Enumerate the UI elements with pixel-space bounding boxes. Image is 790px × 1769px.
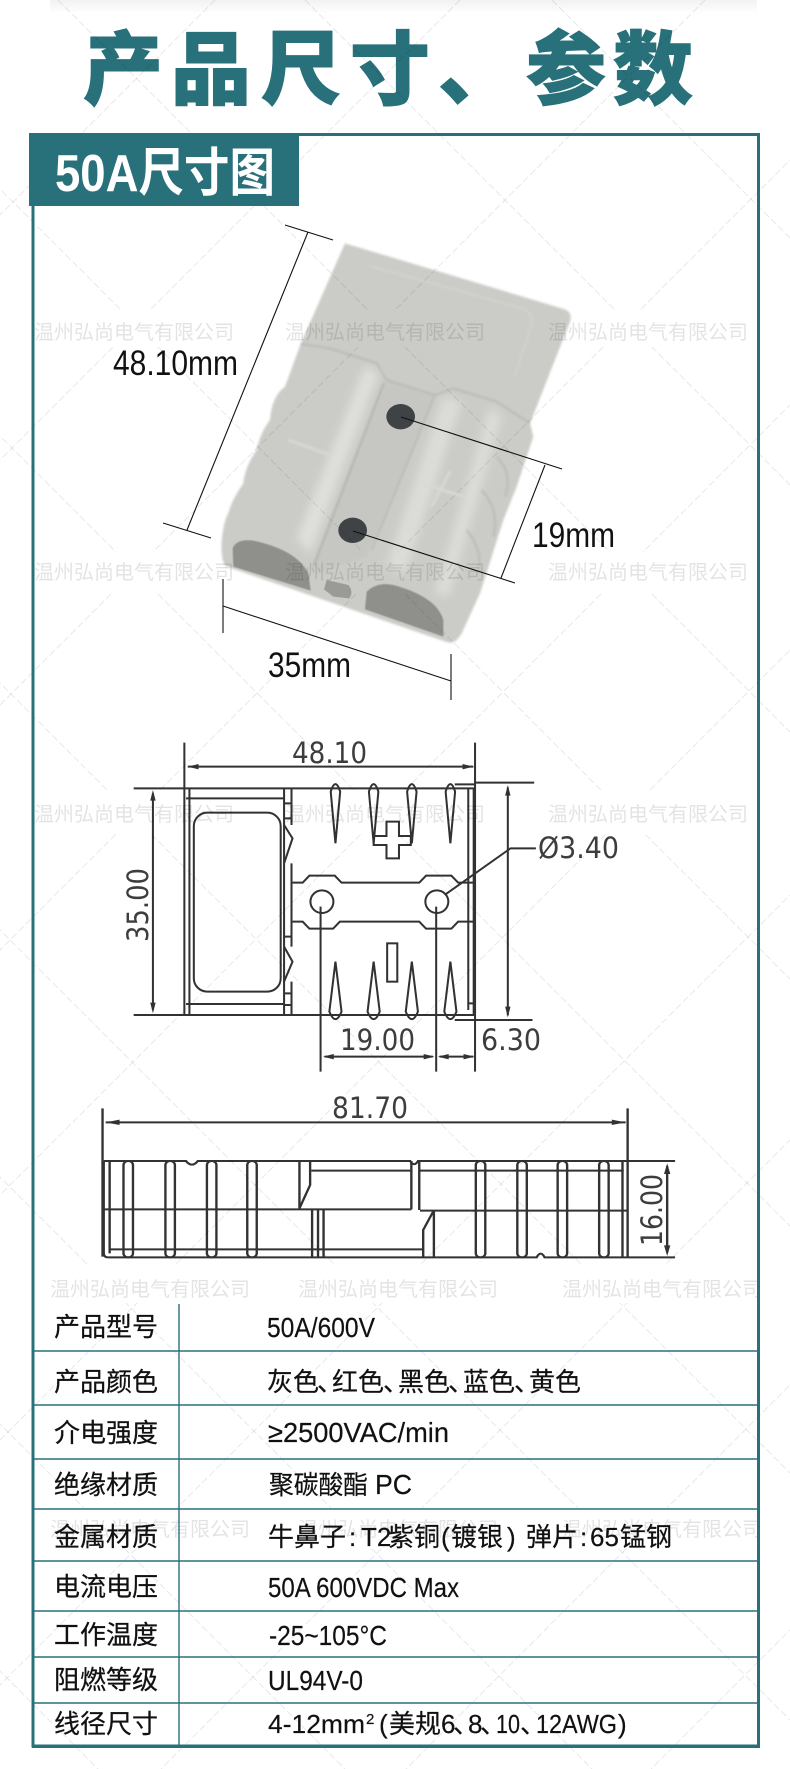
dimension 48.10: 48.10	[292, 736, 367, 770]
watermarks: 温州弘尚电气有限公司	[50, 1513, 250, 1542]
row: product model	[54, 1307, 375, 1344]
watermarks: 温州弘尚电气有限公司	[34, 316, 234, 345]
row: dielectric strength: ≥2500VAC/min	[268, 1417, 449, 1448]
row: current voltage	[54, 1567, 459, 1604]
row: working temperature	[54, 1615, 387, 1652]
watermarks	[34, 316, 762, 1542]
row: metal material: 弹片	[526, 1522, 578, 1552]
row: wire size: 美规	[389, 1709, 441, 1739]
row: colours: 红色	[332, 1367, 384, 1397]
row: colours: 、	[514, 1367, 540, 1397]
row: working temperature: 工作温度	[54, 1615, 158, 1652]
dimension 6.30: 6.30	[481, 1023, 541, 1057]
row: colours: 、	[383, 1367, 409, 1397]
row: colours: 产品颜色	[54, 1362, 158, 1399]
row: wire size: 、	[480, 1709, 506, 1739]
row: metal material: 镀银	[451, 1522, 503, 1552]
row: flame rating: 阻燃等级	[54, 1660, 158, 1697]
top shading strip	[50, 0, 757, 14]
row: wire size: 、	[453, 1709, 479, 1739]
row: metal material: 65	[590, 1522, 619, 1552]
embossed minus	[288, 440, 330, 455]
centre recess	[313, 382, 435, 573]
dimension diameter 3.40: Ø3.40	[538, 831, 619, 865]
row: dielectric strength: 介电强度	[54, 1413, 158, 1450]
row: flame rating: UL94V-0	[268, 1665, 363, 1696]
row: metal material: 金属材质	[54, 1517, 158, 1554]
row: wire size: 2	[366, 1711, 374, 1728]
row: product model: 产品型号	[54, 1307, 158, 1344]
right opening	[365, 584, 443, 637]
row: metal material: T2	[361, 1522, 391, 1552]
title: 产品尺寸、参数	[83, 6, 693, 122]
small square hole	[324, 580, 351, 598]
dimension 19.00: 19.00	[340, 1023, 415, 1057]
row: wire size: 线径尺寸	[54, 1704, 158, 1741]
watermarks: 温州弘尚电气有限公司	[34, 798, 234, 827]
row: colours: 黄色	[529, 1367, 581, 1397]
watermarks: 温州弘尚电气有限公司	[285, 556, 485, 585]
embossed plus	[422, 472, 463, 507]
row: wire size: 6	[441, 1709, 455, 1739]
header tab	[29, 133, 299, 206]
row: wire size: 10	[496, 1709, 520, 1739]
row: colours: 、	[317, 1367, 343, 1397]
header tab text: 50A尺寸图	[55, 145, 275, 203]
watermarks: 温州弘尚电气有限公司	[34, 556, 234, 585]
plate edge shadow	[301, 344, 530, 423]
row: insulation material: 绝缘材质	[54, 1465, 158, 1502]
dimension 35.00: 35.00	[121, 868, 155, 942]
row: metal material	[54, 1517, 672, 1554]
embossed plate outline	[370, 266, 532, 375]
watermarks: 温州弘尚电气有限公司	[548, 798, 748, 827]
photo dimension lines	[163, 225, 562, 700]
technical drawing: side view	[103, 1091, 675, 1257]
row: metal material: :	[580, 1522, 587, 1552]
screw hole upper	[386, 404, 415, 429]
row: metal material: 紫铜	[388, 1522, 440, 1552]
row: colours: 蓝色	[463, 1367, 515, 1397]
row: current voltage: 50A 600VDC Max	[268, 1572, 459, 1603]
row: colours	[54, 1362, 581, 1399]
left opening	[233, 540, 311, 591]
label 48.10mm: 48.10mm	[113, 344, 238, 383]
watermarks: 温州弘尚电气有限公司	[298, 1513, 498, 1542]
label 35mm: 35mm	[268, 646, 351, 685]
row: colours: 黑色	[398, 1367, 450, 1397]
screw hole lower	[338, 518, 367, 543]
row: wire size: 8	[468, 1709, 482, 1739]
watermarks: 温州弘尚电气有限公司	[548, 556, 748, 585]
row: colours: 灰色	[267, 1367, 319, 1397]
row: insulation material: 聚碳酸酯 PC	[269, 1469, 412, 1500]
right ribs	[467, 457, 508, 573]
row: current voltage: 电流电压	[54, 1567, 158, 1604]
row: flame rating	[54, 1660, 363, 1697]
row: wire size: (	[379, 1709, 388, 1739]
spec table	[33, 1304, 758, 1745]
row: insulation material	[54, 1465, 412, 1502]
row: metal material: 锰钢	[620, 1522, 672, 1552]
table grid	[33, 1304, 758, 1745]
row: wire size	[54, 1704, 627, 1741]
label 19mm: 19mm	[532, 516, 615, 555]
watermarks: 温州弘尚电气有限公司	[285, 316, 485, 345]
row: wire size: 12AWG	[536, 1709, 617, 1739]
dimension 16.00: 16.00	[635, 1174, 669, 1246]
row: metal material: :	[349, 1522, 356, 1552]
watermarks: 温州弘尚电气有限公司	[285, 798, 485, 827]
row: dielectric strength	[54, 1413, 449, 1450]
row: product model: 50A/600V	[267, 1312, 375, 1343]
watermarks: 温州弘尚电气有限公司	[562, 1273, 762, 1302]
row: colours: 、	[448, 1367, 474, 1397]
watermarks: 温州弘尚电气有限公司	[298, 1273, 498, 1302]
row: wire size: 4-12mm	[268, 1709, 365, 1739]
technical drawing: top view	[121, 736, 619, 1072]
connector body	[222, 243, 571, 643]
watermarks: 温州弘尚电气有限公司	[50, 1273, 250, 1302]
row: working temperature: -25~105°C	[269, 1620, 387, 1651]
row: metal material: )	[507, 1522, 516, 1552]
row: metal material: 牛鼻子	[268, 1522, 346, 1552]
watermarks: 温州弘尚电气有限公司	[548, 316, 748, 345]
dimension 81.70: 81.70	[332, 1091, 408, 1125]
row: wire size: )	[618, 1709, 627, 1739]
product photo: grey connector	[222, 243, 571, 643]
ridge highlights	[297, 367, 502, 597]
watermarks: 温州弘尚电气有限公司	[562, 1513, 762, 1542]
row: metal material: (	[441, 1522, 450, 1552]
row: wire size: 、	[520, 1709, 546, 1739]
